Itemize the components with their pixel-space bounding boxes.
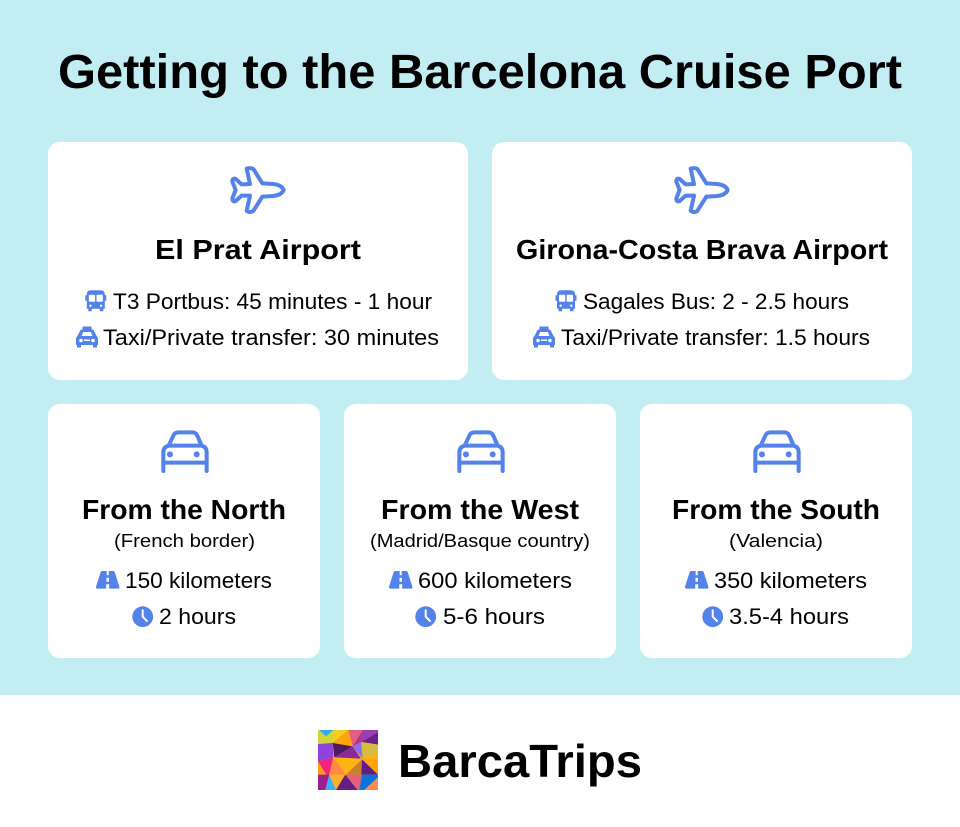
text: duration: 2 hours	[159, 604, 236, 629]
icon: taxi	[76, 326, 98, 348]
icon: car	[163, 432, 207, 471]
text: taxi time: Taxi/Private transfer: 30 minutes	[103, 325, 439, 350]
text: duration: 5-6 hours	[443, 604, 545, 629]
icon: bus	[556, 290, 576, 311]
heading: From the North	[82, 494, 286, 525]
icon: plane	[676, 168, 728, 212]
heading: El Prat Airport	[155, 234, 361, 265]
panel: Girona-Costa Brava Airport	[492, 142, 912, 380]
heading: From the South	[672, 494, 880, 525]
text: distance: 150 kilometers	[125, 568, 272, 593]
icon: plane	[232, 168, 284, 212]
icon: clock	[415, 606, 436, 627]
text: distance: 350 kilometers	[714, 568, 867, 593]
title: Getting to the Barcelona Cruise Port	[58, 46, 902, 99]
footer logo	[318, 730, 378, 790]
subheading: (French border)	[114, 531, 255, 551]
brand name: BarcaTrips	[398, 735, 642, 787]
text: duration: 3.5-4 hours	[729, 604, 849, 629]
icon: clock	[132, 606, 153, 627]
icon: car	[755, 432, 799, 471]
text: taxi time: Taxi/Private transfer: 1.5 hours	[561, 325, 870, 350]
icon: bus	[85, 290, 106, 311]
icon: taxi	[533, 326, 555, 348]
text: bus time: Sagales Bus: 2 - 2.5 hours	[583, 289, 849, 314]
subheading: (Madrid/Basque country)	[370, 531, 590, 551]
heading: Girona-Costa Brava Airport	[516, 234, 888, 265]
heading: From the West	[381, 494, 579, 525]
icon: clock	[702, 606, 723, 627]
panel: From the North	[48, 404, 320, 658]
panel: El Prat Airport	[48, 142, 468, 380]
panel: From the South	[640, 404, 912, 658]
text: distance: 600 kilometers	[418, 568, 572, 593]
icon: road	[685, 571, 708, 589]
panel: From the West	[344, 404, 616, 658]
icon: road	[96, 571, 119, 589]
text: bus time: T3 Portbus: 45 minutes - 1 hour	[113, 289, 432, 314]
subheading: (Valencia)	[729, 531, 823, 551]
icon: car	[459, 432, 503, 471]
icon: road	[389, 571, 412, 589]
